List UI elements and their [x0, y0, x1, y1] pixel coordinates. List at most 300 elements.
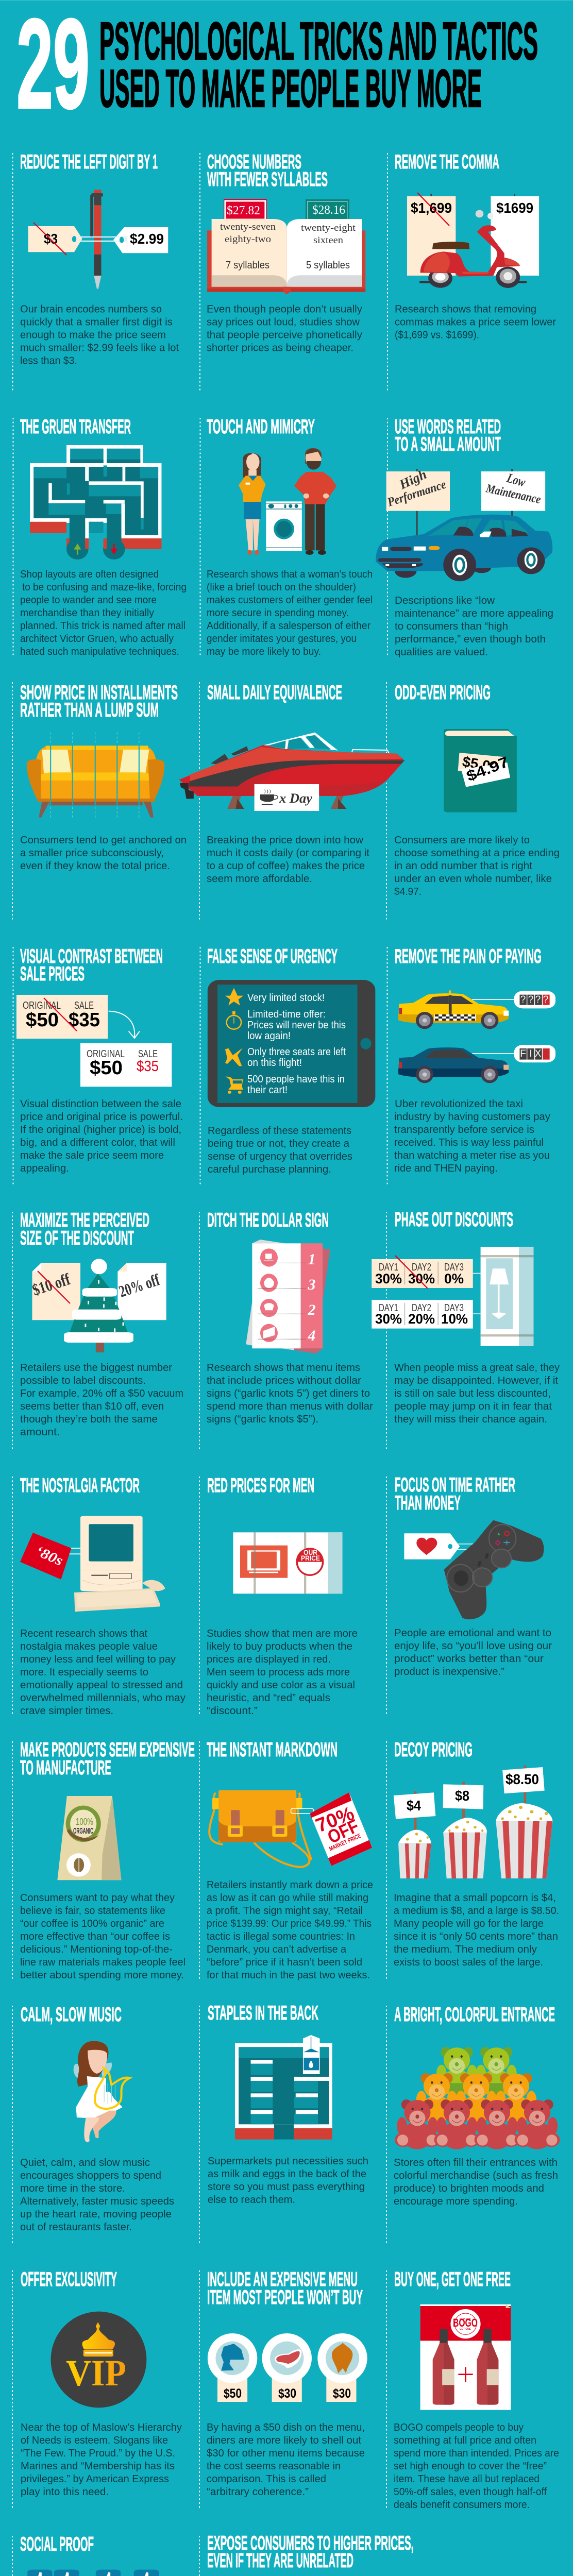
icon: open book with prices: sixteen — [313, 235, 344, 246]
body text: Marines and “Membership has its — [21, 2460, 175, 2472]
body text — [20, 1892, 186, 1981]
panel: the gruen transfer — [20, 416, 187, 657]
body text: the medium. The medium only — [394, 1943, 537, 1955]
body text: signs (“garlic knots 5”) get diners to — [207, 1387, 370, 1399]
body text: Recent research shows that — [20, 1628, 147, 1639]
panel: choose numbers with fewer syllables — [207, 151, 365, 354]
body text: $30 for other menu items because — [207, 2447, 365, 2459]
heading — [207, 2268, 363, 2309]
icon: scooter with price signs — [407, 193, 539, 288]
body text — [207, 303, 363, 354]
body text — [20, 2157, 174, 2233]
body text: prices are displayed in red. — [207, 1653, 331, 1665]
body text: transparently before service is — [394, 1124, 534, 1136]
icon: lamp box with discount schedules: 0% — [444, 1271, 464, 1286]
panel: maximize the perceived size of the discount — [20, 1209, 183, 1438]
body text: Consumers want to pay what they — [20, 1892, 175, 1904]
icon: menu without dollar signs: 4 — [307, 1327, 315, 1344]
body text: product is inexpensive.” — [394, 1666, 504, 1677]
body text: Alternatively, faster music speeds — [20, 2195, 174, 2207]
icon: tablet with urgency messages: 500 people have this in — [247, 1074, 345, 1085]
body text: Imagine that a small popcorn is $4, — [394, 1892, 556, 1904]
body text: that people perceive phonetically — [207, 329, 363, 341]
panel: false sense of urgency — [207, 945, 375, 1175]
body text: is still on sale but less discounted, — [394, 1387, 551, 1399]
body text — [395, 303, 556, 341]
body text: Stores often fill their entrances with — [394, 2157, 558, 2168]
icon: before and after price cards: $50 — [26, 1009, 59, 1031]
body text: encourages shoppers to spend — [20, 2170, 161, 2181]
title — [16, 0, 538, 135]
body text: qualities are valued. — [395, 646, 488, 658]
body text: a medium is $8, and a large is $8.50. — [394, 1905, 559, 1917]
icon: taxi with unknown meter and car with fixed price: ? — [543, 994, 548, 1005]
body text: Even though people don’t usually — [207, 303, 363, 315]
heading: CHOOSE NUMBERS — [207, 151, 301, 173]
icon: tablet with urgency messages — [208, 980, 375, 1107]
heading — [20, 682, 178, 721]
body text: Shop layouts are often designed — [20, 568, 159, 580]
panel: remove the comma — [395, 151, 556, 341]
icon: satchel with 70% off tag: 70% — [313, 1803, 357, 1837]
body text: in an odd number that is right — [394, 860, 532, 872]
icon: christmas tree with discount tags — [30, 1259, 166, 1352]
body text: Research shows that removing — [395, 303, 536, 315]
body text: (like a brief touch on the shoulder) — [207, 581, 356, 593]
panel: red prices for men — [207, 1475, 358, 1717]
body text: shorter prices as being cheaper. — [207, 342, 353, 354]
heading: THAN MONEY — [395, 1492, 461, 1514]
body text: heuristic, and “red” equals — [207, 1692, 330, 1704]
heading — [20, 945, 163, 985]
heading: SIZE OF THE DISCOUNT — [20, 1227, 134, 1249]
body text: set high enough to cover the “free” — [394, 2460, 547, 2472]
panel: phase out discounts — [372, 1209, 560, 1425]
body text: likely to buy products when the — [207, 1640, 352, 1652]
body text — [20, 1098, 183, 1174]
body text: emotionally appeal to stressed and — [20, 1679, 183, 1691]
heading — [20, 1739, 195, 1779]
icon: three plates with prices: $50 — [224, 2386, 242, 2401]
body text: than watching a meter rise as you — [394, 1149, 550, 1161]
icon: lamp box with discount schedules: 20% — [408, 1311, 435, 1327]
body text: the cost seems reasonable in — [207, 2460, 341, 2472]
icon: open book with prices: eighty-two — [225, 234, 271, 245]
icon: open book with prices — [207, 199, 365, 294]
text: MAKE PRODUCTS SEEM EXPENSIVE — [20, 1739, 195, 1761]
body text: up the heart rate, moving people — [20, 2208, 172, 2220]
icon: menu without dollar signs: 2 — [307, 1301, 315, 1318]
icon: lamp box with discount schedules: DAY3 — [444, 1262, 464, 1273]
body text: “The Few. The Proud.” by the U.S. — [21, 2447, 175, 2459]
panel: reduce the left digit by 1 — [20, 151, 179, 367]
body text: something at full price and often — [394, 2434, 536, 2446]
icon: sofa cut into installments — [27, 733, 164, 819]
body text: If the original (higher price) is bold, — [20, 1124, 181, 1136]
icon: before and after price cards: SALE — [138, 1048, 158, 1060]
panel: staples in the back: STAPLES IN THE BACK — [208, 2002, 318, 2024]
body text: product” works better than “our — [394, 1653, 544, 1665]
body text: spend more than intended. Prices are — [394, 2447, 559, 2459]
panel: make products seem expensive to manufacture — [20, 1739, 195, 1981]
body text: spend more than menus with dollar — [207, 1400, 373, 1412]
body text: to consumers than “high — [395, 620, 508, 632]
body text: much smaller: $2.99 feels like a lot — [20, 342, 179, 354]
icon: store map with milk carton — [235, 2035, 332, 2140]
body text: price and original price is powerful. — [20, 1111, 183, 1123]
panel: include an expensive menu item — [207, 2268, 367, 2498]
icon: pencil with two price tags: $2.99 — [130, 231, 164, 247]
body text: When people miss a great sale, they — [394, 1362, 560, 1374]
body text: “our coffee is 100% organic” are — [20, 1918, 164, 1929]
body text: even if they know the total price. — [20, 860, 170, 872]
body text: seem more affordable. — [207, 873, 312, 885]
body text: received. This is way less painful — [394, 1137, 544, 1148]
body text: money less and feel willing to pay — [20, 1653, 176, 1665]
body text — [394, 2421, 559, 2511]
icon: three plates with prices: $30 — [278, 2386, 296, 2401]
icon: pencil with two price tags — [28, 190, 168, 289]
body text: less than $3. — [20, 355, 77, 367]
icon: three popcorn sizes with prices: $8.50 — [505, 1771, 539, 1787]
body text: believe is fair, so statements like — [20, 1905, 165, 1917]
icon: lamp box with discount schedules: DAY2 — [412, 1262, 431, 1273]
body text: appealing. — [20, 1162, 69, 1174]
body text: deals benefit consumers more. — [394, 2499, 530, 2511]
icon: three plates with prices: $30 — [333, 2386, 351, 2401]
icon: taxi with unknown meter and car with fixed price: F — [520, 1048, 526, 1059]
body text — [207, 1628, 358, 1717]
body text — [394, 1892, 559, 1968]
icon: open book with prices: $27.82 — [227, 204, 260, 217]
icon: car with word signs: Low — [505, 470, 527, 490]
icon: open book with prices: twenty-eight — [301, 223, 356, 233]
icon: green book with price tags — [444, 729, 517, 812]
icon: before and after price cards: $35 — [137, 1058, 159, 1075]
body text: maintenance” are more appealing — [395, 607, 553, 619]
body text — [208, 1125, 352, 1175]
heading — [207, 2532, 414, 2572]
body text: under an even whole number, like — [394, 873, 552, 885]
body text: planned. This trick is named after mall — [20, 620, 186, 632]
icon: tablet with urgency messages: low again! — [247, 1030, 291, 1042]
icon: green book with price tags: $4.97 — [464, 754, 511, 785]
body text: Our brain encodes numbers so — [20, 303, 162, 315]
icon: satchel with 70% off tag — [209, 1790, 372, 1867]
body text: privileges.” by American Express — [21, 2473, 169, 2485]
panel: staples in the back — [208, 2002, 368, 2206]
body text: ($1,699 vs. $1699). — [395, 329, 479, 341]
body text: gender imitates your gestures, you — [207, 633, 357, 645]
body text: for that much in the past two weeks. — [207, 1969, 370, 1981]
body text: People are emotional and want to — [394, 1627, 551, 1639]
body text — [394, 2157, 558, 2207]
heading — [20, 1209, 149, 1249]
body text: out of restaurants faster. — [20, 2221, 132, 2233]
heading — [395, 416, 501, 455]
icon: three popcorn sizes with prices: $8 — [455, 1788, 469, 1804]
body text: Regardless of these statements — [208, 1125, 351, 1137]
body text: “before” price if it hasn’t been sold — [207, 1956, 362, 1968]
body text — [394, 834, 560, 897]
icon: green book with price tags: $5.00 — [461, 753, 499, 775]
icon: lamp box with discount schedules: DAY1 — [379, 1262, 398, 1273]
body text: makes customers of either gender feel — [207, 594, 373, 606]
body text: choose something at a price ending — [394, 847, 560, 859]
body text: Supermarkets put necessities such — [208, 2155, 368, 2167]
body text — [207, 2421, 365, 2498]
body text: more secure in spending money. — [207, 607, 349, 619]
icon: car with word signs: Maintenance — [484, 482, 542, 506]
icon: organic coffee bag — [57, 1796, 121, 1880]
body text: play into this need. — [21, 2486, 109, 2498]
icon: VIP badge with crown: VIP — [66, 2352, 126, 2394]
body text — [20, 1628, 186, 1717]
body text — [395, 595, 553, 658]
body text: more time in the store. — [20, 2182, 125, 2194]
body text: nostalgia makes people value — [20, 1640, 158, 1652]
icon: before and after price cards — [16, 995, 172, 1087]
body text: big, and a different color, that will — [20, 1137, 175, 1148]
body text — [207, 1362, 373, 1425]
panel: show price in installments — [20, 682, 187, 872]
icon: lamp box with discount schedules: 10% — [441, 1311, 468, 1327]
body text: a smaller price subconsciously, — [20, 847, 164, 859]
panel: reduce the left digit by 1: REDUCE THE LEFT DIGIT BY 1 — [20, 151, 158, 173]
icon: lamp box with discount schedules: 30% — [408, 1271, 435, 1286]
icon: satchel with 70% off tag: OFF — [324, 1815, 362, 1848]
body text: merchandise than they initially — [20, 607, 155, 619]
panel: the nostalgia factor: THE NOSTALGIA FACTOR — [20, 1475, 140, 1497]
icon: lamp box with discount schedules: DAY2 — [412, 1302, 431, 1314]
icon: christmas tree with discount tags: 20% off — [116, 1270, 162, 1301]
body text: enjoy life, so “you’ll love using our — [394, 1640, 552, 1652]
body text: commas makes a price seem lower — [395, 316, 556, 328]
icon: before and after price cards: $50 — [90, 1057, 123, 1079]
body text: Consumers tend to get anchored on — [20, 834, 187, 846]
panel: touch and mimicry — [207, 416, 373, 657]
body text — [20, 834, 187, 872]
body text: Descriptions like “low — [395, 595, 495, 606]
icon: angel with harp — [74, 2041, 130, 2142]
icon: before and after price cards: ORIGINAL — [23, 1000, 61, 1011]
heading: SHOW PRICE IN INSTALLMENTS — [20, 682, 178, 704]
body text — [20, 1362, 183, 1438]
icon: taxi with unknown meter and car with fixed price: ? — [520, 994, 526, 1005]
body text: 50%-off sales, even though half-off — [394, 2486, 547, 2498]
body text: “arbitrary coherence.” — [207, 2486, 309, 2498]
panel: false sense of urgency: FALSE SENSE OF URGENCY — [207, 945, 338, 968]
heading — [207, 151, 328, 191]
body text: BOGO compels people to buy — [394, 2421, 524, 2433]
body text: $4.97. — [394, 886, 422, 897]
icon: open book with prices: 7 syllables — [226, 260, 269, 271]
body text: since it is “only 50 cents more” than — [394, 1930, 558, 1942]
heading: THE INSTANT MARKDOWN — [207, 1739, 338, 1761]
icon: tablet with urgency messages: Prices will never be this — [247, 1020, 346, 1031]
icon: BOGO wine bottles — [420, 2304, 511, 2410]
body text: comparison. This is called — [207, 2473, 326, 2485]
body text: as low as it can go while still making — [207, 1892, 368, 1904]
body text: Visual distinction between the sale — [20, 1098, 181, 1110]
icon: pencil with two price tags: $3 — [44, 231, 58, 247]
body text: Retailers use the biggest number — [20, 1362, 172, 1374]
icon: couple with washing machine — [239, 448, 336, 555]
body text: enough to make the price seem — [20, 329, 166, 341]
icon: menu without dollar signs — [246, 1240, 330, 1353]
body text: Near the top of Maslow’s Hierarchy — [21, 2421, 182, 2433]
panel: offer exclusivity — [21, 2268, 182, 2498]
body text: say prices out loud, studies show — [207, 316, 360, 328]
panel: decoy pricing — [394, 1739, 559, 1968]
panel: the nostalgia factor — [20, 1475, 186, 1717]
body text: delicious.” Mentioning top-of-the- — [20, 1943, 173, 1955]
body text: sense of urgency that overrides — [208, 1150, 352, 1162]
icon: taxi with unknown meter and car with fixed price: ? — [528, 994, 533, 1005]
body text: to be confusing and maze-like, forcing — [22, 581, 187, 593]
icon: before and after price cards: SALE — [74, 1000, 94, 1011]
icon: christmas tree with discount tags: $10 off — [30, 1269, 73, 1299]
body text: as milk and eggs in the back of the — [208, 2168, 366, 2180]
panel: use words related to a small amount — [376, 416, 553, 658]
icon: before and after price cards: $35 — [69, 1009, 100, 1031]
panel: social proof — [20, 2533, 187, 2576]
icon: tablet with urgency messages: Only three seats are left — [247, 1046, 346, 1058]
body text: seems better than $10 off, even — [20, 1400, 164, 1412]
icon: taxi with unknown meter and car with fixed price — [398, 990, 555, 1083]
panel: small daily equivalence: SMALL DAILY EQUIVALENCE — [207, 682, 342, 704]
icon: open book with prices: twenty-seven — [220, 222, 276, 232]
panel: remove the pain of paying — [394, 945, 555, 1174]
body text: By having a $50 dish on the menu, — [207, 2421, 365, 2433]
icon: thumbs up crowd and bicycle — [27, 2570, 159, 2576]
body text — [394, 1627, 552, 1677]
icon: three popcorn sizes with prices — [394, 1766, 552, 1878]
body text — [207, 834, 369, 885]
panel: choose numbers with fewer syllables: WITH FEWER SYLLABLES — [207, 168, 328, 191]
panel: the gruen transfer: THE GRUEN TRANSFER — [20, 416, 131, 438]
icon: open book with prices: $28.16 — [312, 204, 345, 217]
body text: hated such manipulative techniques. — [20, 646, 179, 657]
body text: exists to boost sales of the large. — [394, 1956, 543, 1968]
body text: being true or not, they create a — [208, 1138, 350, 1149]
icon: scooter with price signs: $1,699 — [411, 200, 452, 216]
icon: taxi with unknown meter and car with fixed price: I — [529, 1048, 532, 1059]
body text: Quiet, calm, and slow music — [20, 2157, 150, 2168]
body text — [394, 1098, 551, 1174]
icon: lamp box with discount schedules: 30% — [375, 1311, 402, 1327]
body text: quickly and use color as a visual — [207, 1679, 355, 1691]
body text: may be disappointed. However, if it — [394, 1375, 558, 1386]
icon: lamp box with discount schedules — [372, 1247, 533, 1346]
icon: open book with prices: 5 syllables — [306, 260, 350, 271]
body text: they will miss their chance again. — [394, 1413, 547, 1425]
icon: retro computer with 80s tag — [20, 1516, 165, 1612]
body text: may be more likely to buy. — [207, 646, 321, 657]
heading: TOUCH AND MIMICRY — [207, 416, 315, 438]
icon: VIP badge with crown — [51, 2312, 146, 2408]
body text: people to wander and see more — [20, 594, 157, 606]
icon: boat with coffee per day card — [179, 733, 405, 811]
body text: else to reach them. — [208, 2194, 295, 2206]
body text: Research shows that a woman’s touch — [207, 568, 373, 580]
icon: tablet with urgency messages: their cart! — [247, 1084, 288, 1096]
body text: Additionally, if a salesperson of either — [207, 620, 370, 632]
body text: performance,” even though both — [395, 633, 546, 645]
body text: people may jump on it in fear that — [394, 1400, 552, 1412]
body text: encourage more spending. — [394, 2195, 518, 2207]
body text: price $139.99: Our price $49.99.” This — [207, 1918, 372, 1929]
body text: For example, 20% off a $50 vacuum — [20, 1387, 183, 1399]
icon: organic coffee bag: 100% — [76, 1817, 93, 1827]
body text: Research shows that menu items — [207, 1362, 360, 1374]
icon: ad with red sticker — [233, 1532, 343, 1594]
icon: store maze — [30, 445, 161, 560]
body text — [394, 1362, 560, 1425]
body text — [20, 303, 179, 367]
body text: Breaking the price down into how — [207, 834, 363, 846]
icon: lamp box with discount schedules: DAY1 — [379, 1302, 398, 1314]
body text: Consumers are more likely to — [394, 834, 530, 846]
panel: include an expensive menu item: ITEM MOST PEOPLE WON’T BUY — [207, 2286, 363, 2309]
panel: calm, slow music — [20, 2004, 174, 2233]
heading: RATHER THAN A LUMP SUM — [20, 699, 159, 721]
body text: item. These have all but replaced — [394, 2473, 540, 2485]
body text: overwhelmed millennials, who may — [20, 1692, 186, 1704]
panel: maximize the perceived size of the discount: MAXIMIZE THE PERCEIVED — [20, 1209, 149, 1231]
body text — [207, 1879, 373, 1981]
body text: though they’re both the same — [20, 1413, 158, 1425]
icon: organic coffee bag: ORGANIC — [73, 1827, 93, 1836]
body text: industry by having customers pay — [394, 1111, 551, 1123]
body text — [208, 2155, 368, 2206]
icon: BOGO wine bottles: GET ONE — [460, 2328, 471, 2331]
icon: car with word signs: High — [396, 467, 429, 493]
body text: that include prices without dollar — [207, 1375, 361, 1386]
panel: expose consumers to higher prices — [207, 2532, 534, 2576]
heading: TO MANUFACTURE — [20, 1757, 111, 1779]
body text: amount. — [20, 1426, 60, 1438]
heading: EVEN IF THEY ARE UNRELATED — [207, 2550, 353, 2572]
body text: to a cup of coffee) makes the price — [207, 860, 365, 872]
body text: more effective than “our coffee is — [20, 1930, 170, 1942]
icon: before and after price cards: ORIGINAL — [87, 1048, 125, 1060]
panel: focus on time rather than money — [394, 1474, 552, 1677]
body text — [21, 2421, 182, 2498]
icon: game controller with heart tag — [404, 1520, 544, 1619]
panel: ditch the dollar sign: DITCH THE DOLLAR SIGN — [207, 1209, 329, 1231]
icon: scooter with price signs: $1699 — [496, 200, 533, 216]
body text: Denmark, you can’t advertise a — [207, 1943, 347, 1955]
body text: ride and THEN paying. — [394, 1162, 498, 1174]
icon: lamp box with discount schedules: DAY3 — [444, 1302, 464, 1314]
body text: quickly that a smaller first digit is — [20, 316, 173, 328]
icon: taxi with unknown meter and car with fixed price: ? — [535, 994, 541, 1005]
panel: decoy pricing: DECOY PRICING — [394, 1739, 473, 1761]
panel: social proof: SOCIAL PROOF — [20, 2533, 94, 2555]
body text: more. It especially seems to — [20, 1666, 148, 1678]
heading: SALE PRICES — [20, 963, 85, 985]
body text: store so you must pass everything — [208, 2181, 365, 2193]
body text: Many people will go for the large — [394, 1918, 544, 1929]
icon: tablet with urgency messages: Limited-time offer: — [247, 1009, 326, 1020]
body text: better about spending more money. — [20, 1969, 184, 1981]
panel: offer exclusivity: OFFER EXCLUSIVITY — [21, 2268, 117, 2291]
icon: ad with red sticker: PRICE — [301, 1554, 320, 1562]
icon: menu without dollar signs: 3 — [307, 1276, 315, 1293]
panel: red prices for men: RED PRICES FOR MEN — [207, 1475, 314, 1497]
panel: visual contrast between sale prices — [16, 945, 183, 1174]
